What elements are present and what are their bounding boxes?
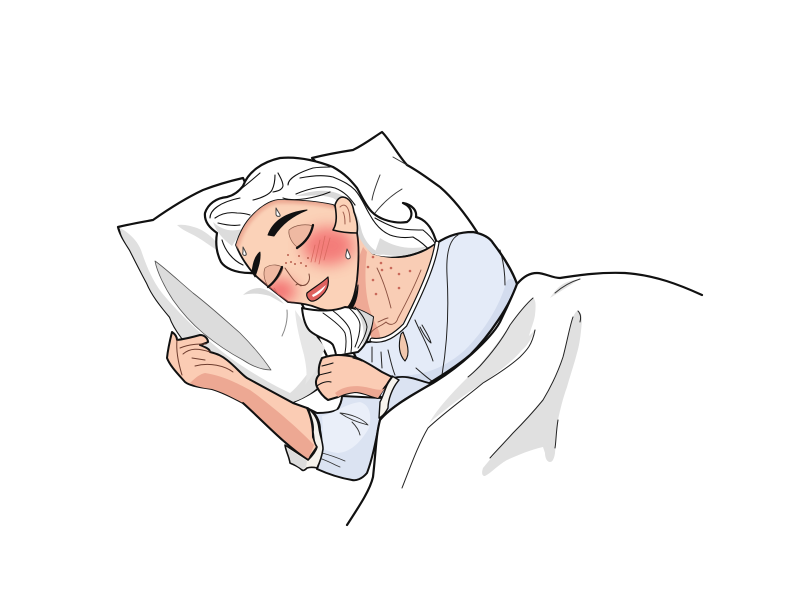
upper sleeve near blanket (380, 377, 434, 420)
shadow under chin (346, 285, 358, 311)
rash dots (367, 256, 411, 295)
hair shading (213, 222, 243, 246)
cuff at wrist (379, 376, 399, 418)
pillow shading (120, 225, 330, 402)
gown fold lines (372, 235, 505, 384)
face (236, 200, 359, 311)
gown collar and tie (372, 243, 437, 361)
freckles (285, 254, 309, 267)
lower sleeve (307, 396, 382, 480)
hair strands (210, 167, 435, 265)
nose (285, 268, 309, 286)
hair, main mass (205, 158, 437, 280)
ear (333, 197, 357, 233)
nightgown torso (350, 232, 517, 405)
illustration: woman sleeping, flushed and sweating (116, 130, 704, 526)
fist (316, 355, 392, 400)
closed eyes and brows (252, 210, 313, 287)
neck and chest (345, 233, 437, 340)
front pillow (118, 178, 335, 402)
back pillow (312, 132, 477, 245)
blanket fold lines (402, 298, 581, 488)
lace cuff of lower sleeve (285, 408, 323, 470)
gown shading (382, 279, 516, 405)
arm and hand on pillow (167, 332, 317, 460)
lower hair lobe (302, 307, 373, 356)
blanket shading folds (429, 279, 582, 476)
sweat drops (243, 208, 350, 259)
blanket (347, 273, 702, 530)
blush and forehead shade (236, 200, 354, 303)
mouth (307, 277, 328, 301)
